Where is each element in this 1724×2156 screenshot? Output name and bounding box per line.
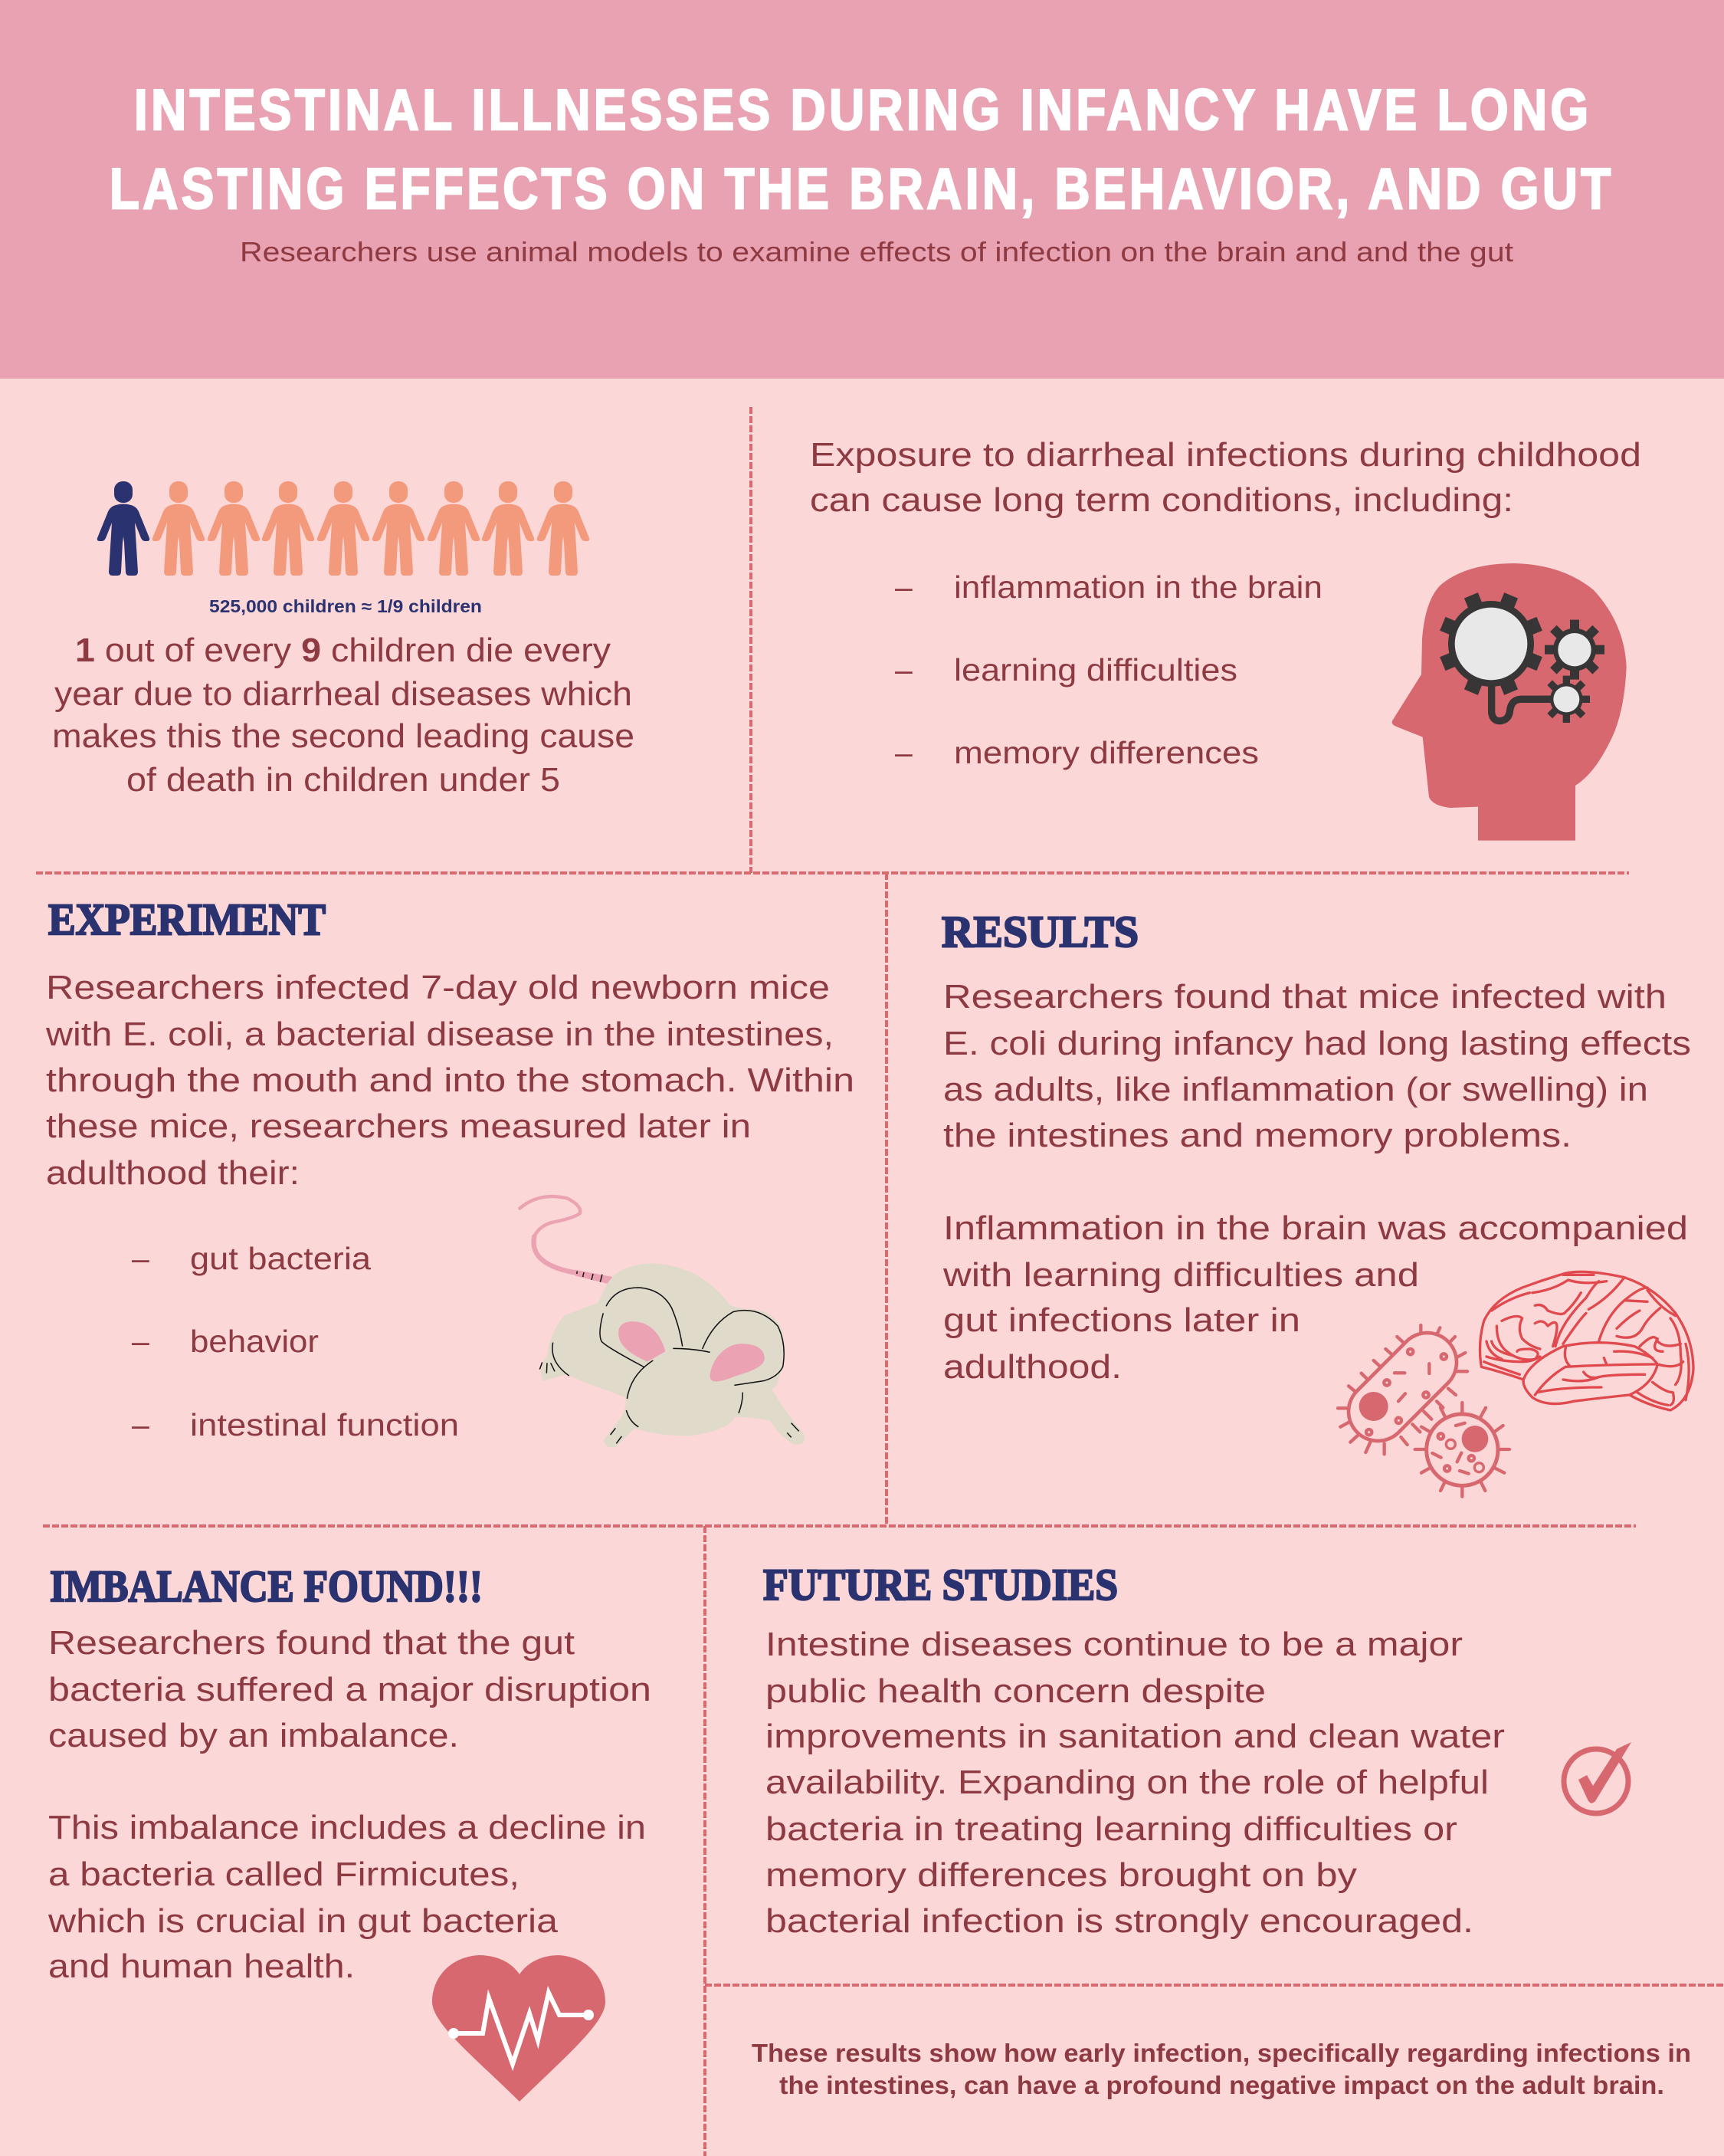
experiment description: these mice, researchers measured later in <box>46 1108 751 1145</box>
title <box>110 77 1611 221</box>
icon: row of nine children <box>97 481 589 576</box>
measures list: – <box>132 1324 149 1359</box>
results text: with learning difficulties and <box>942 1256 1419 1294</box>
results text: Researchers found that mice infected with <box>943 978 1667 1016</box>
future studies text: Intestine diseases continue to be a major <box>765 1626 1463 1663</box>
icon: brain <box>1480 1272 1693 1410</box>
heading: imbalance found: IMBALANCE FOUND!!! <box>50 1561 483 1611</box>
panel: imbalance found <box>48 1561 651 2102</box>
experiment description: through the mouth and into the stomach. Within <box>46 1062 854 1099</box>
statistic text: 1 out of every 9 children die every <box>75 632 611 669</box>
future studies text: memory differences brought on by <box>765 1856 1357 1894</box>
conditions list: inflammation in the brain <box>954 569 1322 605</box>
measures list <box>132 1241 459 1442</box>
icon: heart with pulse <box>432 1955 605 2102</box>
experiment description: with E. coli, a bacterial disease in the intestines, <box>45 1016 834 1053</box>
imbalance text: Researchers found that the gut <box>48 1624 575 1662</box>
future studies text: bacterial infection is strongly encouraged. <box>765 1902 1473 1940</box>
future studies text: availability. Expanding on the role of helpful <box>765 1764 1489 1801</box>
conclusion callout <box>752 2039 1691 2099</box>
results text: E. coli during infancy had long lasting effects <box>943 1025 1691 1062</box>
conclusion callout: the intestines, can have a profound negative impact on the adult brain. <box>779 2071 1664 2099</box>
future studies text: improvements in sanitation and clean water <box>765 1718 1505 1755</box>
imbalance text: caused by an imbalance. <box>48 1717 459 1754</box>
icon: bacteria <box>1338 1325 1509 1497</box>
conditions list: – <box>895 569 913 605</box>
title: INTESTINAL ILLNESSES DURING INFANCY HAVE LONG <box>134 77 1588 142</box>
subtitle: Researchers use animal models to examine effects of infection on the brain and and the gut <box>240 236 1513 267</box>
measures list: – <box>132 1241 149 1276</box>
icon: mouse <box>519 1196 805 1448</box>
heading: results: RESULTS <box>942 907 1139 957</box>
statistic text: makes this the second leading cause <box>52 717 634 755</box>
icon: check mark <box>1564 1742 1631 1813</box>
conditions list: learning difficulties <box>954 652 1237 687</box>
intro text <box>810 436 1641 519</box>
imbalance text: and human health. <box>48 1948 355 1985</box>
conditions list: memory differences <box>954 735 1259 770</box>
panel: experiment <box>45 894 854 1448</box>
results text <box>942 978 1691 1386</box>
imbalance text: which is crucial in gut bacteria <box>48 1902 559 1940</box>
conclusion callout: These results show how early infection, specifically regarding infections in <box>752 2039 1691 2067</box>
panel: future studies <box>763 1560 1631 1940</box>
intro text: Exposure to diarrheal infections during childhood <box>810 436 1641 474</box>
panel: long term conditions <box>810 436 1641 841</box>
conditions list <box>895 569 1322 770</box>
future studies text: public health concern despite <box>765 1672 1266 1710</box>
future studies text <box>765 1626 1505 1940</box>
results text: gut infections later in <box>943 1301 1300 1339</box>
header banner <box>0 0 1724 379</box>
results text: adulthood. <box>943 1348 1122 1386</box>
heading: future studies: FUTURE STUDIES <box>763 1560 1118 1610</box>
icon: head with gears <box>1392 563 1627 841</box>
conditions list: – <box>895 652 913 687</box>
panel: results <box>942 907 1693 1497</box>
heading: experiment: EXPERIMENT <box>48 894 326 944</box>
measures list: behavior <box>190 1324 319 1359</box>
statistic text: of death in children under 5 <box>126 761 560 799</box>
imbalance text: This imbalance includes a decline in <box>48 1809 646 1846</box>
experiment description: Researchers infected 7-day old newborn mice <box>46 969 830 1006</box>
results text: as adults, like inflammation (or swelling) in <box>943 1071 1648 1108</box>
caption: 525,000 children: 525,000 children ≈ 1/9 children <box>209 596 482 616</box>
measures list: gut bacteria <box>190 1241 371 1276</box>
imbalance text: bacteria suffered a major disruption <box>48 1671 651 1708</box>
results text: Inflammation in the brain was accompanied <box>943 1209 1688 1247</box>
panel: child mortality statistic <box>52 481 634 799</box>
imbalance text <box>48 1624 651 1985</box>
statistic text <box>52 632 634 799</box>
future studies text: bacteria in treating learning difficulties or <box>765 1810 1457 1848</box>
results text: the intestines and memory problems. <box>943 1117 1572 1154</box>
statistic text: year due to diarrheal diseases which <box>54 675 632 713</box>
experiment description: adulthood their: <box>46 1154 300 1192</box>
imbalance text: a bacteria called Firmicutes, <box>48 1856 519 1893</box>
title: LASTING EFFECTS ON THE BRAIN, BEHAVIOR, AND GUT <box>110 156 1611 221</box>
measures list: – <box>132 1407 149 1442</box>
intro text: can cause long term conditions, including: <box>810 481 1513 519</box>
conditions list: – <box>895 735 913 770</box>
measures list: intestinal function <box>190 1407 459 1442</box>
experiment description <box>45 969 854 1192</box>
